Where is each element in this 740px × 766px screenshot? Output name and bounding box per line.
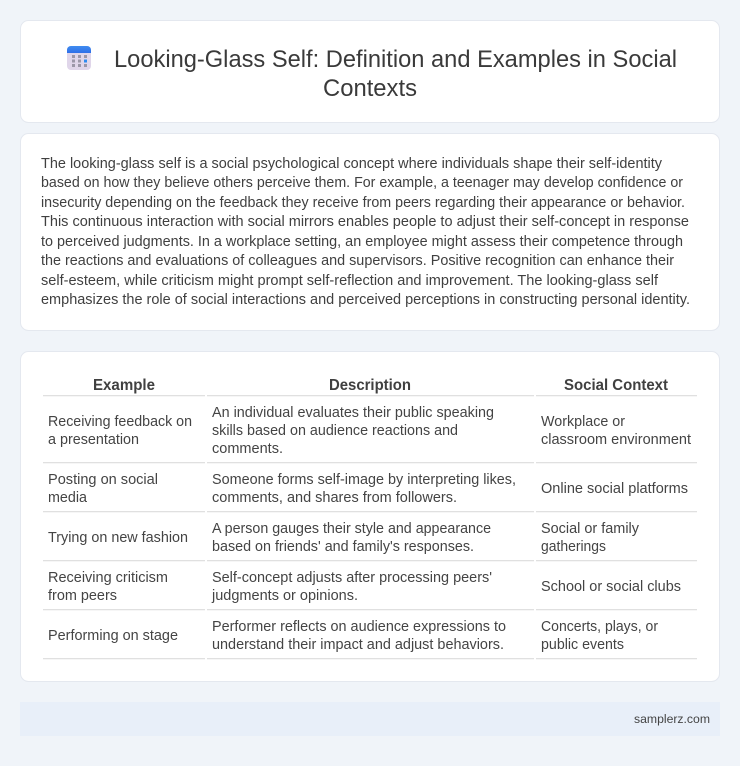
table row: presentation feedback: comments. xyxy=(212,441,283,457)
icon: calendar xyxy=(67,46,91,70)
table row: stage performance: Concerts, plays, or xyxy=(541,619,658,635)
panel: examples table xyxy=(20,352,720,682)
text block: definition: to perceived judgments. In a workplace setting, an employee might assess their competence through xyxy=(41,234,683,250)
table row: peer criticism: Self-concept adjusts after processing peers' xyxy=(212,570,492,586)
table row: presentation feedback: classroom environment xyxy=(541,432,691,448)
table header row: Description xyxy=(329,377,411,394)
table row: new fashion: Social or family xyxy=(541,521,640,537)
table row: presentation feedback: a presentation xyxy=(48,432,139,448)
table header row: Example xyxy=(93,377,155,394)
panel: header card xyxy=(20,20,720,122)
table header row: Social Context xyxy=(564,377,668,394)
title: Looking-Glass Self: Definition and Examples in Social xyxy=(114,46,677,73)
text block: definition xyxy=(41,156,690,308)
title: Contexts xyxy=(323,75,417,102)
table row: new fashion xyxy=(48,521,640,555)
table row: stage performance: Performing on stage xyxy=(48,628,178,644)
table row: peer criticism: judgments or opinions. xyxy=(211,588,358,604)
table row: social media: Online social platforms xyxy=(541,481,688,497)
text block: definition: emphasizes the role of social interactions and perceived perceptions in constructing personal identity. xyxy=(41,292,690,308)
title xyxy=(114,46,677,102)
table row: new fashion: based on friends' and family's responses. xyxy=(212,539,474,555)
text block: definition: self-esteem, while criticism might prompt self-reflection and improvement. The looking-glass self xyxy=(41,273,658,289)
text block: definition: insecurity depending on the feedback they receive from peers regarding their appearance or behavior. xyxy=(41,195,685,211)
footer bar xyxy=(20,702,720,736)
table row: peer criticism xyxy=(48,570,681,604)
footer source text: samplerz.com xyxy=(634,712,710,726)
text block: definition: the reactions and evaluations of colleagues and supervisors. Positive recognition can enhance their xyxy=(41,253,674,269)
table row: new fashion: gatherings xyxy=(541,539,606,555)
table row: presentation feedback: skills based on audience reactions and xyxy=(212,423,458,439)
table row: stage performance: Performer reflects on audience expressions to xyxy=(212,619,506,635)
table header row xyxy=(93,377,668,394)
text block: definition: based on how they believe others perceive them. For example, a teenager may develop confidence or xyxy=(41,175,683,191)
table row: social media: Someone forms self-image by interpreting likes, xyxy=(212,472,516,488)
text block: definition: The looking-glass self is a social psychological concept where individuals shape their self-identity xyxy=(41,156,663,172)
table row: new fashion: Trying on new fashion xyxy=(48,530,188,546)
table row: presentation feedback: Receiving feedback on xyxy=(48,414,192,430)
table row: presentation feedback xyxy=(48,405,691,457)
table row: presentation feedback: An individual evaluates their public speaking xyxy=(212,405,494,421)
table row: social media xyxy=(48,472,688,506)
table row: social media: media xyxy=(48,490,87,506)
table row: new fashion: A person gauges their style and appearance xyxy=(212,521,491,537)
table row: presentation feedback: Workplace or xyxy=(541,414,625,430)
table row: stage performance: understand their impact and adjust behaviors. xyxy=(212,637,504,653)
table row: peer criticism: Receiving criticism xyxy=(48,570,168,586)
table row: peer criticism: from peers xyxy=(48,588,117,604)
panel: definition paragraph xyxy=(20,134,720,330)
text block: definition: This continuous interaction with social mirrors enables people to adjust their self-concept in response xyxy=(41,214,689,230)
table row: social media: Posting on social xyxy=(48,472,158,488)
table row: social media: comments, and shares from followers. xyxy=(212,490,457,506)
table row: stage performance xyxy=(48,619,658,653)
table row: peer criticism: School or social clubs xyxy=(541,579,681,595)
table row: stage performance: public events xyxy=(541,637,624,653)
